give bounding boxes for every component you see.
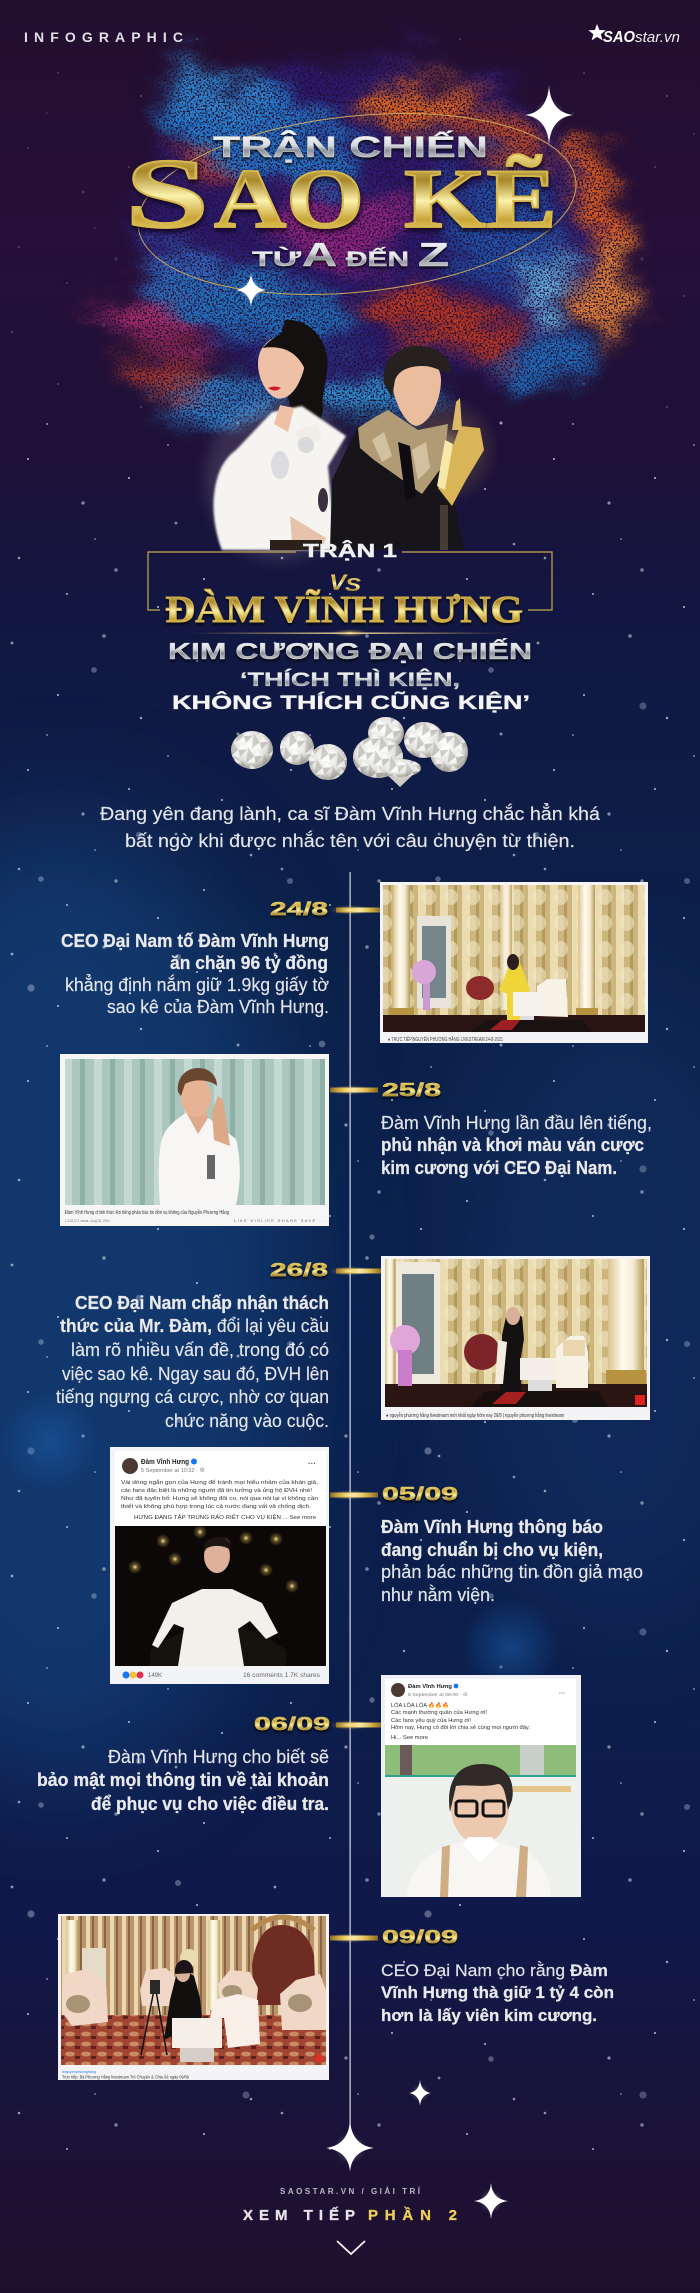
timeline spine — [350, 872, 351, 2148]
facebook post: 6 September: Đàm Vĩnh Hưng — [408, 1684, 452, 1690]
reactions: 16 comments 1.7K shares — [243, 1673, 320, 1679]
text: 25/8: kim cương với CEO Đại Nam. — [381, 1158, 617, 1178]
sparkle star: lower left — [236, 273, 266, 307]
connector: 09/09 — [330, 1933, 378, 1943]
title: SAO KẼ: S — [125, 138, 209, 249]
facebook post: 6 September: ··· — [559, 1691, 565, 1697]
entry 06/09 — [37, 1675, 581, 1897]
text: 24/8: ăn chặn 96 tỷ đồng — [170, 953, 328, 973]
text: 25/8: phủ nhận và khơi màu ván cược — [381, 1135, 644, 1155]
entry 24/8 — [61, 882, 648, 1043]
footer call to action: PHẦN 2 — [368, 2207, 457, 2224]
text: 06/09: để phục vụ cho việc điều tra. — [91, 1794, 329, 1814]
logo: SAOstar.vn: star.vn — [635, 29, 680, 46]
section frame: Trận 1 — [148, 540, 552, 631]
text: 09/09: Vĩnh Hưng thà giữ 1 tỷ 4 còn — [381, 1983, 614, 2002]
title: TỪ A ĐẾN Z — [252, 236, 449, 273]
text: 25/8 — [381, 1113, 652, 1178]
subtitle: quote — [172, 669, 530, 714]
facebook post: 6 September: 6 September at 08:00 · ⊕ — [408, 1692, 468, 1697]
heading: TRẬN 1: TRẬN 1 — [303, 540, 397, 561]
photo: livestream 09/09: Trực tiếp: Bà Phương Hằng livestream Trò Chuyện & Chia Sẻ ngày 09/09 — [62, 2074, 189, 2080]
entry 09/09 — [58, 1914, 614, 2080]
photo: video Đàm Vĩnh Hưng: LIKE DISLIKE SHARE SAVE ... — [234, 1218, 325, 1223]
subtitle: KIM CƯƠNG ĐẠI CHIẾN: KIM CƯƠNG ĐẠI CHIẾN — [168, 637, 532, 664]
text: 09/09: CEO Đại Nam cho rằng Đàm — [381, 1961, 608, 1980]
text: 24/8: sao kê của Đàm Vĩnh Hưng. — [107, 997, 329, 1017]
title block — [125, 130, 557, 273]
avatar — [122, 1458, 138, 1474]
facebook post: 5 September: ··· — [308, 1459, 316, 1468]
facebook post: 5 September: Đàm Vĩnh Hưng — [141, 1459, 189, 1466]
facebook post: 5 September — [110, 1447, 329, 1684]
text: 24/8 — [61, 931, 329, 1017]
date: 25/8: 25/8 — [382, 1080, 441, 1100]
text: 26/8: thức của Mr. Đàm, đổi lại yêu cầu — [60, 1316, 329, 1336]
facebook post: 6 September — [381, 1675, 581, 1897]
logo: SAOstar.vn — [588, 24, 680, 46]
title: SAO KẼ — [125, 138, 557, 249]
title: TỪ A ĐẾN Z: A — [302, 236, 337, 273]
vs mark — [329, 570, 361, 595]
footer source: SAOSTAR.VN / GIẢI TRÍ — [280, 2187, 421, 2196]
title: TỪ A ĐẾN Z: TỪ — [252, 247, 302, 271]
icon: diamonds — [231, 717, 468, 787]
vs mark: S — [345, 575, 361, 595]
connector: 26/8 — [330, 1266, 382, 1276]
photo: livestream 26/8 — [381, 1256, 650, 1420]
title ellipse ring — [129, 93, 585, 315]
text: 05/09 — [381, 1517, 643, 1605]
text: 26/8: làm rõ nhiều vấn đề, trong đó có — [71, 1340, 329, 1360]
sparkle star: upper right — [525, 85, 573, 145]
vs mark: V — [329, 570, 349, 595]
caption: ● nguyễn phương hằng livestream mới nhất ngày hôm nay 26/8 | nguyễn phương hằng livestream — [386, 1412, 564, 1419]
avatar — [391, 1683, 405, 1697]
entry 05/09 — [110, 1447, 643, 1684]
text: 05/09: Đàm Vĩnh Hưng thông báo — [381, 1517, 603, 1537]
intro text: Đang yên đang lành, ca sĩ Đàm Vĩnh Hưng chắc hẳn khá — [100, 803, 601, 824]
icon: down chevron — [337, 2241, 365, 2254]
connector: 24/8 — [330, 905, 381, 915]
photo: livestream 09/09 — [58, 1914, 329, 2080]
title: TRẬN CHIẾN: TRẬN CHIẾN — [213, 130, 488, 164]
photo: video Đàm Vĩnh Hưng: 1,216,371 views • Aug 25, 2021 — [65, 1218, 111, 1223]
nebula artwork — [82, 52, 635, 422]
intro text: bất ngờ khi được nhắc tên với câu chuyện từ thiện. — [125, 830, 575, 851]
logo: SAOstar.vn: SAO — [603, 29, 636, 46]
date: 05/09: 05/09 — [382, 1484, 458, 1504]
photo: man on black chair with bulbs — [115, 1525, 326, 1666]
text: 05/09: như nằm viện. — [381, 1584, 495, 1605]
facebook post: 5 September: các fans đặc biệt là những người đã tin tưởng và ủng hộ ĐVH nhé! — [121, 1487, 312, 1494]
caption: Đàm Vĩnh Hưng chính thức lên tiếng phản bác tin đồn vụ không của Nguyễn Phương Hằng — [65, 1209, 229, 1216]
heading: ĐÀM VĨNH HƯNG: ĐÀM VĨNH HƯNG — [165, 589, 523, 631]
facebook post: 6 September: Hôm nay, Hưng có đôi lời chia sẻ cùng mọi người đây. — [391, 1725, 530, 1731]
title: SAO KẼ: AO — [214, 152, 364, 246]
text: 06/09 — [37, 1747, 329, 1814]
caption: ● TRỰC TIẾP|NGUYỄN PHƯƠNG HẰNG LIVESTREAM 24-8-2021 — [388, 1035, 503, 1043]
entry 25/8 — [60, 1054, 652, 1226]
facebook post: 6 September: Các mạnh thường quân của Hưng ơi! — [391, 1709, 487, 1716]
footer call to action — [243, 2207, 457, 2224]
text: 24/8: CEO Đại Nam tố Đàm Vĩnh Hưng — [61, 931, 329, 951]
entry 26/8 — [56, 1256, 650, 1431]
text: 26/8: CEO Đại Nam chấp nhận thách — [75, 1293, 329, 1313]
subtitle: quote: KHÔNG THÍCH CŨNG KIỆN’ — [172, 692, 530, 714]
photo: man with glasses — [385, 1745, 576, 1897]
sparkle star: footer — [474, 2183, 508, 2219]
portrait: singer in black and gold — [330, 346, 500, 550]
header label: INFOGRAPHIC: INFOGRAPHIC — [24, 29, 183, 45]
photo: livestream 24/8 — [380, 882, 648, 1043]
facebook post: 5 September: HƯNG ĐANG TẬP TRUNG RÁO RIẾT CHO VỤ KIỆN ... See more — [134, 1513, 316, 1521]
connector: 06/09 — [330, 1720, 382, 1730]
text: 26/8: tiếng ngưng cá cược, nhờ cơ quan — [56, 1387, 329, 1407]
sparkle star: timeline end — [326, 2120, 374, 2172]
text: 26/8: chức năng vào cuộc. — [165, 1411, 329, 1431]
text: 26/8 — [56, 1293, 329, 1431]
reactions: 149K — [148, 1673, 162, 1679]
title: SAO KẼ: KẼ — [404, 152, 557, 246]
connector: 25/8 — [330, 1085, 378, 1095]
text: 24/8: khẳng định nắm giữ 1.9kg giấy tờ — [65, 974, 329, 995]
date: 24/8: 24/8 — [270, 899, 328, 919]
facebook post: 6 September: Các fans yêu quý của Hưng ơi! — [391, 1717, 471, 1724]
facebook post: 6 September: Hi... See more — [391, 1735, 428, 1741]
reactions — [122, 1672, 320, 1679]
text: 06/09: Đàm Vĩnh Hưng cho biết sẽ — [108, 1747, 329, 1767]
text: 25/8: Đàm Vĩnh Hưng lần đầu lên tiếng, — [381, 1113, 652, 1133]
facebook post: 5 September: Như đã tuyên bố: Hưng sẽ không đôi co, nói qua nói lại vì không cần — [121, 1496, 318, 1502]
facebook post: 5 September: Vài dòng ngắn gọn của Hưng để tránh mọi hiểu nhầm của khán giả, — [121, 1479, 319, 1486]
facebook post: 5 September: 5 September at 10:32 · ⊕ — [141, 1467, 205, 1474]
text: 06/09: bảo mật mọi thông tin về tài khoản — [37, 1770, 329, 1790]
footer call to action: XEM TIẾP — [243, 2207, 355, 2224]
facebook post: 5 September: thiết và không phù hợp trong lúc cả nước đang vất vả chống dịch. — [121, 1504, 312, 1510]
text: 26/8: việc sao kê. Ngay sau đó, ĐVH lên — [62, 1364, 329, 1384]
caption: #nguyenphuonghang — [62, 2070, 96, 2074]
connector: 05/09 — [330, 1490, 378, 1500]
text: 05/09: phản bác những tin đồn giả mạo — [381, 1562, 643, 1582]
glow divider — [190, 629, 510, 637]
date: 06/09: 06/09 — [254, 1714, 330, 1734]
title: TỪ A ĐẾN Z: Z — [418, 236, 449, 273]
text: 05/09: đang chuẩn bị cho vụ kiện, — [381, 1540, 603, 1560]
title: TỪ A ĐẾN Z: ĐẾN — [346, 248, 409, 271]
sparkle star: small — [409, 2080, 431, 2106]
date: 09/09: 09/09 — [382, 1927, 458, 1947]
photo: video Đàm Vĩnh Hưng — [60, 1054, 329, 1226]
date: 26/8: 26/8 — [270, 1260, 328, 1280]
facebook post: 6 September: LÓA LÓA LÓA 🔥🔥🔥 — [391, 1701, 449, 1709]
subtitle: quote: ‘THÍCH THÌ KIỆN, — [240, 669, 460, 691]
text: 09/09: hơn là lấy viên kim cương. — [381, 2006, 597, 2025]
intro text — [100, 803, 601, 851]
text: 09/09 — [381, 1961, 614, 2025]
portrait: CEO woman in white — [205, 320, 355, 560]
